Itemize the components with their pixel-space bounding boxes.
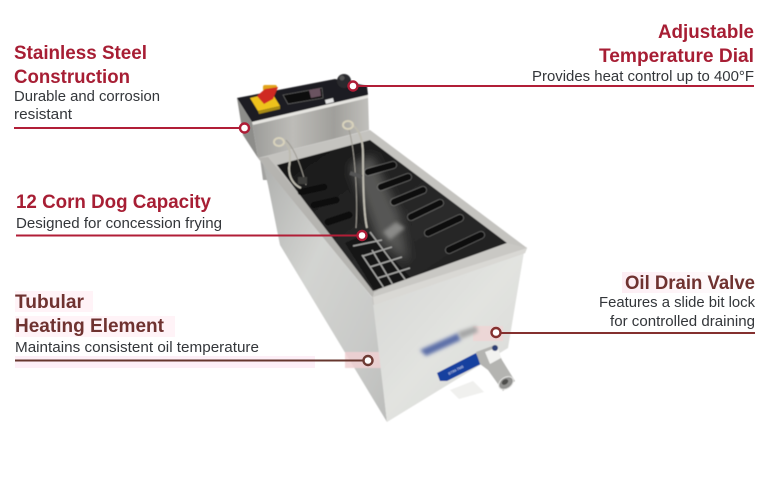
description [599,295,756,330]
description: resistant [14,107,72,123]
interior wall slots [368,165,481,250]
interior centre reflection [350,155,408,262]
callout: adjustable temperature dial [348,22,754,90]
heading: Oil Drain Valve [625,273,755,294]
callout: tubular heating element [15,291,372,368]
rim near edge highlight [373,243,527,297]
description: for controlled draining [610,314,755,330]
heading: Stainless Steel [14,43,147,64]
fryer front tank wall [373,252,524,422]
control box front [252,95,369,158]
tank rim [258,130,527,305]
pink band across left wall [345,352,383,368]
callout: stainless steel construction [14,43,249,132]
blue valve handle: BTIM-TM8 [448,365,464,376]
leader line [492,328,755,337]
heading: Adjustable [658,22,754,43]
callout: oil drain valve [492,272,756,337]
heading: Construction [14,67,130,88]
description [14,89,160,123]
control box left side [237,98,258,158]
leader line [14,124,249,132]
heading [15,292,165,337]
pink highlight bands [15,291,315,368]
leader line [348,82,754,90]
control box black top panel [237,79,368,122]
heating element rack [346,231,411,290]
heading: 12 Corn Dog Capacity [16,192,211,213]
description: Maintains consistent oil temperature [15,340,259,356]
leader line [16,231,366,240]
heading: Heating Element [15,316,165,337]
heading [599,22,754,67]
description: Provides heat control up to 400°F [532,69,754,85]
mirrored handle reflection [420,333,461,356]
description: Durable and corrosion [14,89,160,105]
callout: 12 corn dog capacity [16,192,366,240]
blue valve handle [437,353,481,381]
leader line [15,356,372,365]
drain valve body [476,345,516,392]
pink highlight band [622,272,755,293]
fryer left tank wall [262,160,387,422]
heading: Temperature Dial [599,46,754,67]
basket hook right [343,121,367,228]
pink band behind oil valve marker [473,326,503,341]
description: Designed for concession frying [16,216,222,232]
oil tank interior [277,140,507,291]
small rear foot [260,156,268,180]
description: Features a slide bit lock [599,295,756,311]
heading: Tubular [15,292,85,313]
yellow power switch [250,85,280,114]
reflection under front wall [450,381,484,399]
digital display [283,88,334,104]
temperature dial [337,74,351,88]
heading [14,43,147,88]
fryer product illustration [237,74,527,422]
basket hook left [274,138,307,188]
